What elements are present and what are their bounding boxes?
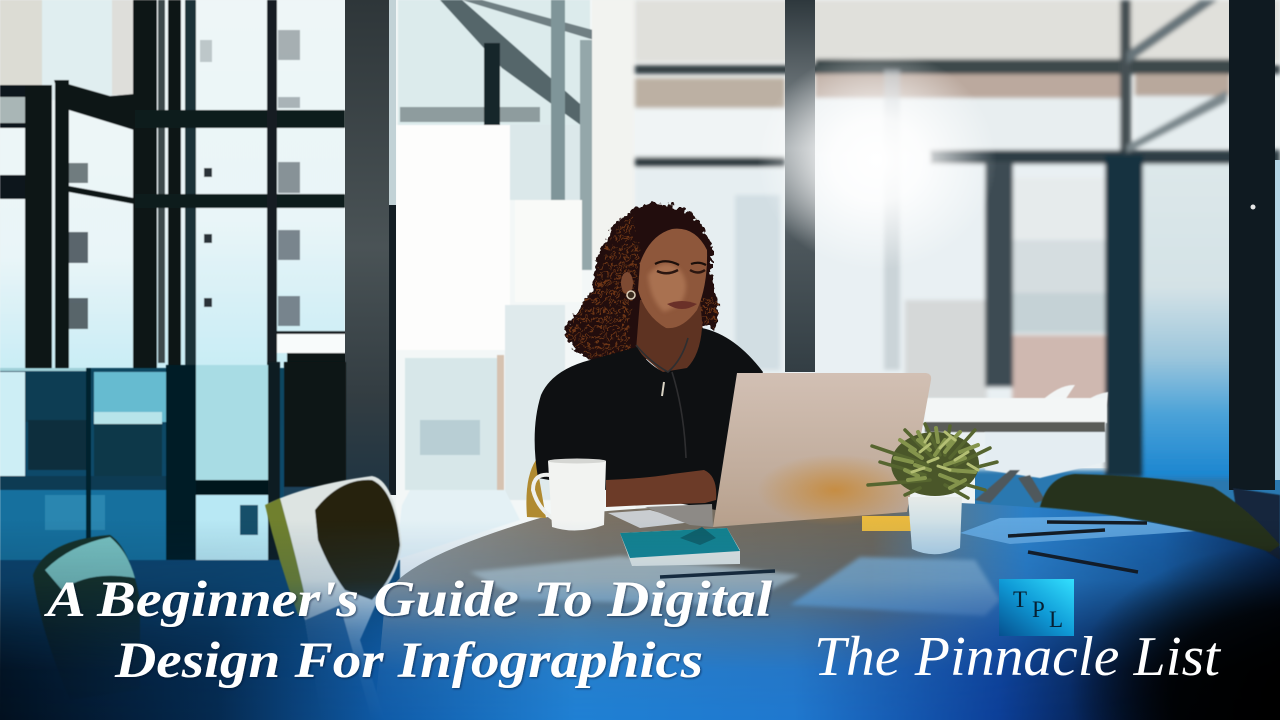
pens on table xyxy=(660,522,1147,577)
document front xyxy=(790,557,1000,616)
white coffee mug xyxy=(533,458,606,531)
floor seen through the far glass xyxy=(975,468,1280,560)
logo: TPL badge: P xyxy=(1032,597,1045,622)
face xyxy=(638,229,707,328)
paper stack on table xyxy=(470,556,800,605)
facial highlights xyxy=(648,264,686,312)
eyes and brows xyxy=(655,261,706,265)
title: Design For Infographics xyxy=(114,633,703,689)
neck and chest xyxy=(636,300,704,374)
green chair centre foreground xyxy=(265,476,402,720)
round meeting table xyxy=(374,502,1280,720)
ear xyxy=(621,272,633,294)
title: A Beginner's Guide To Digital xyxy=(44,572,773,628)
woman xyxy=(526,204,763,518)
central glass wall xyxy=(395,0,636,560)
concrete column xyxy=(345,0,396,495)
necklace cord xyxy=(636,338,688,458)
dark vignette bottom right xyxy=(1060,540,1280,720)
right windows and frames xyxy=(635,0,1280,478)
dark window pillars xyxy=(785,0,1280,490)
green chair right xyxy=(1040,474,1280,560)
pendant xyxy=(662,382,664,396)
teal notebook xyxy=(620,527,740,566)
logo: TPL badge: T xyxy=(1013,587,1027,612)
left windows and frames xyxy=(0,0,347,370)
wooden chair behind xyxy=(526,460,546,518)
foliage xyxy=(868,424,997,498)
building windows outside xyxy=(278,30,300,60)
logo: The Pinnacle List wordmark: The Pinnacle List xyxy=(814,626,1221,688)
laptop xyxy=(645,373,931,527)
potted plant xyxy=(868,424,997,554)
black top xyxy=(535,328,763,510)
green chair left foreground xyxy=(33,535,140,700)
forearm and hand xyxy=(606,470,716,507)
documents right side xyxy=(960,516,1197,544)
sticky notes xyxy=(862,516,912,531)
logo: TPL badge xyxy=(999,579,1074,636)
title xyxy=(44,572,773,689)
earring xyxy=(627,291,635,299)
back hair xyxy=(563,204,718,370)
background table and white chairs xyxy=(925,385,1108,503)
blue colour wash along the bottom xyxy=(0,520,1280,720)
logo: TPL badge: L xyxy=(1049,607,1063,632)
sunlight flare xyxy=(757,50,997,270)
notebook under laptop xyxy=(608,510,693,528)
glass balustrade xyxy=(0,362,400,720)
lips xyxy=(667,301,697,309)
